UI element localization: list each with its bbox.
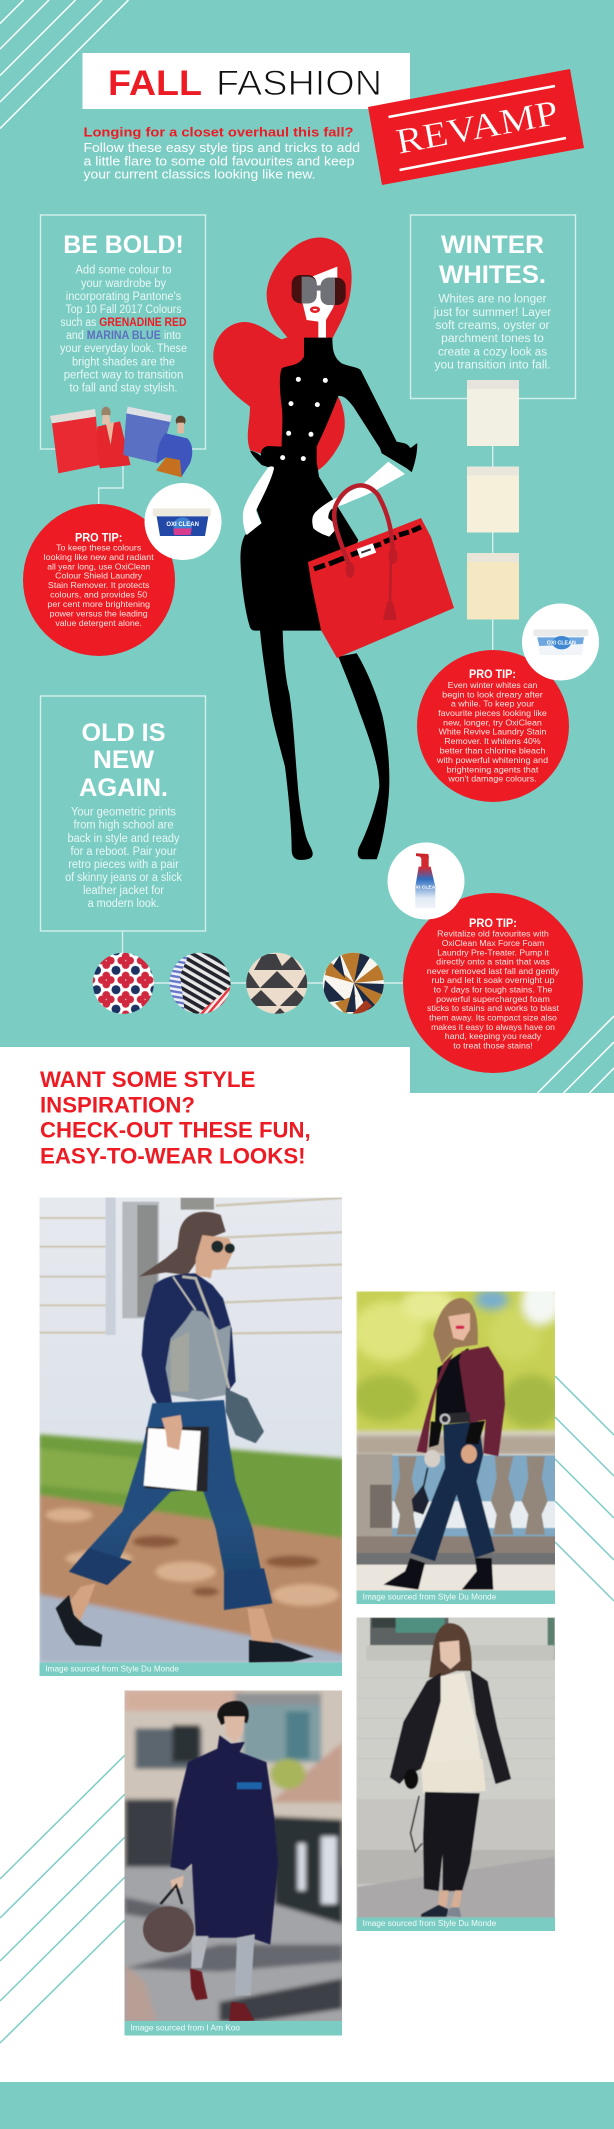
decorative stripes: teal bottom right [538,1016,614,1093]
text: be bold body: Top 10 Fall 2017 Colours [66,304,182,316]
icon: white revive tub [522,604,599,680]
text: old is new body: a modern look. [88,898,159,910]
hair [213,237,352,472]
decorative stripes: top left [0,0,128,128]
pro tip 3 text: OxiClean Max Force Foam [442,938,544,948]
text: be bold body: and MARINA BLUE into [66,330,181,342]
heading: winter whites: WINTER [441,231,544,259]
text: old is new body: leather jacket for [83,885,164,897]
pro tip 3 text: Laundry Pre-Treater. Pump it [437,947,549,957]
pro tip 3 text [427,918,560,1050]
text: old is new body: back in style and ready [68,833,180,845]
text: be bold body: your everyday look. These [60,343,187,355]
pro tip 2 text: new, longer, try OxiClean [443,717,542,727]
pro tip 2 text: PRO TIP: [469,669,516,681]
footer band [0,2082,614,2129]
text: be bold body: incorporating Pantone's [66,291,181,303]
icon: colour shield tub [144,483,222,560]
pro tip 2 text [436,669,548,784]
text: old is new body: for a reboot. Pair your [70,846,177,858]
pro tip 1 text: power versus the leading [50,608,148,618]
pro tip 1 text: value detergent alone. [55,618,142,628]
pro tip 2 text: better than chlorine bleach [440,745,546,755]
text: old is new body: Your geometric prints [71,807,176,819]
text: old is new body: from high school are [74,820,174,832]
pro tip 1 text: per cent more brightening [47,599,150,609]
decorative stripes: white section right [555,1376,614,1601]
coat [240,338,417,631]
panel: old is new again [40,696,206,931]
text: winter whites body: you transition into fall. [434,359,550,371]
intro text: Follow these easy style tips and tricks to add [84,141,360,155]
text: winter whites body: soft creams, oyster or [436,320,550,332]
text: be bold body: perfect way to transition [64,370,183,382]
bag handles [334,485,393,604]
pro tip 3 [403,893,583,1073]
heading: old is new again: OLD IS [82,719,166,747]
pro tip 2 text: a while. To keep your [451,699,534,709]
bag belt [314,527,421,569]
pro tip 1 text [44,532,154,628]
handbag [308,485,454,658]
heading: style inspiration: WANT SOME STYLE [40,1067,255,1092]
heading: winter whites [439,231,546,289]
text: be bold body: Add some colour to [76,264,172,276]
text: be bold body: such as GRENADINE RED [60,317,186,329]
heading: style inspiration: INSPIRATION? [40,1093,195,1118]
bag tassel [346,548,398,620]
heading: style inspiration: CHECK-OUT THESE FUN, [40,1118,311,1143]
pro tip 3 text: Revitalize old favourites with [437,929,549,939]
text: winter whites body [433,293,551,371]
red swatch [50,409,99,473]
photo 4: navy coat [118,1684,349,2036]
text: winter whites body: create a cozy look as [438,346,547,358]
icon: colour shield tub: OXI CLEAN [166,522,199,528]
pro tip 3 text: directly onto a stain that was [436,957,550,967]
caption 2 [356,1590,555,1604]
decorative stripes: white section left [0,1755,125,2043]
photo 1: street style jeans [39,1195,344,1676]
photo 3: leather jacket and fringe [353,1614,560,1931]
pro tip 1 text: all year long, use OxiClean [47,561,150,571]
print swatches [93,952,384,1016]
pro tip 1 text: Colour Shield Laundry [55,571,143,581]
caption 3: Image sourced from Style Du Monde [363,1919,496,1928]
gloves [243,462,405,537]
intro text: Longing for a closet overhaul this fall? [84,126,354,140]
text: old is new body: of skinny jeans or a slick [65,872,182,884]
photo 2: burgundy jacket [352,1278,562,1604]
pro tip 1 text: PRO TIP: [75,532,122,544]
pro tip 1 [23,504,175,656]
pro tip 1 text: looking like new and radiant [44,552,154,562]
heading: old is new again: NEW [93,746,154,774]
print: radial wedges [322,952,384,1016]
icon: foam bottle: OXI CLEAN [412,885,439,891]
pantone swatches and models [50,407,192,477]
heading: style inspiration: EASY-TO-WEAR LOOKS! [40,1144,306,1169]
caption 3 [356,1918,555,1931]
text: winter whites body: parchment tones to [441,333,544,345]
caption 1 [40,1662,342,1676]
pro tip 3 text: makes it easy to always have on [431,1022,555,1032]
pro tip 3 text: PRO TIP: [469,918,517,930]
pro tip 2 text: White Revive Laundry Stain [439,727,547,737]
pro tip 3 text: them away. Its compact size also [429,1012,557,1022]
winter white swatches [467,380,519,620]
text: be bold body [60,264,187,395]
pro tip 2 text: Even winter whites can [448,680,538,690]
pro tip 3 text: sticks to stains and works to blast [427,1003,560,1013]
print: diagonal stripes [169,952,232,1014]
heading: style inspiration [40,1067,311,1169]
print: quatrefoil [93,953,154,1014]
pro tip 3 text: hand, keeping you ready [445,1031,542,1041]
sunglasses [292,275,346,305]
pro tip 3 text: powerful supercharged foam [436,994,550,1004]
blue swatch [123,407,172,463]
teal background panel [0,0,614,1093]
title banner: FALL [108,64,202,103]
pro tip 1 text: Stain Remover. It protects [48,580,150,590]
text: old is new body [65,807,182,910]
panel: winter whites [410,215,576,398]
pro tip 1 text: colours, and provides 50 [50,589,147,599]
icon: white revive tub: OXI CLEAN [547,641,576,647]
pro tip 2 [417,650,569,802]
heading: winter whites: WHITES. [439,261,546,289]
connector: swatches to pro tip 1 [99,465,123,505]
intro text [84,126,360,182]
heading: old is new again: AGAIN. [79,774,168,802]
pro tip 3 text: to treat those stains! [453,1040,533,1050]
text: be bold body: bright shades are the [72,357,175,369]
face [303,267,337,338]
pro tip 2 text: Remover. It whitens 40% [444,736,541,746]
intro text: a little flare to some old favourites and keep [84,154,354,168]
caption 2: Image sourced from Style Du Monde [363,1592,496,1602]
text: winter whites body: Whites are no longer [438,293,547,305]
connector: winter swatches [492,440,494,652]
icon: foam bottle [388,842,464,920]
heading: be bold: BE BOLD! [63,231,184,259]
panel: be bold [40,215,206,449]
text: be bold body: your wardrobe by [81,278,166,290]
text: old is new body: retro pieces with a pair [68,859,179,871]
lips [310,306,320,313]
title banner: FASHION [216,64,382,103]
pro tip 3 text: rub and let it soak overnight up [432,975,555,985]
pro tip 2 text: brightening agents that [447,764,539,774]
model in blue [156,416,192,477]
pro tip 2 text: favourite pieces looking like [438,708,547,718]
coat buttons [280,377,328,461]
revamp stamp [368,69,584,185]
fashion figure illustration [213,237,417,860]
revamp stamp: REVAMP [393,92,561,162]
pro tip 1 text: To keep these colours [56,543,142,553]
legs [260,630,389,860]
heading: old is new again [79,719,168,802]
model in red [97,407,131,468]
caption 4 [124,2021,342,2036]
title banner [82,53,410,109]
text: be bold body: to fall and stay stylish. [70,383,178,395]
bag clasp [357,543,376,558]
pro tip 3 text: never removed last fall and gently [427,966,560,976]
intro text: your current classics looking like new. [84,168,316,182]
pro tip 2 text: with powerful whitening and [436,755,548,765]
pro tip 3 text: to 7 days for tough stains. The [434,984,553,994]
pro tip 2 text: begin to look dreary after [442,689,543,699]
caption 1: Image sourced from Style Du Monde [45,1664,179,1673]
connector: prints [122,931,405,983]
pro tip 2 text: won't damage colours. [447,774,537,784]
caption 4: Image sourced from I Am Koo [130,2024,241,2032]
text: winter whites body: just for summer! Layer [433,307,551,319]
print: triangles [246,952,308,1014]
